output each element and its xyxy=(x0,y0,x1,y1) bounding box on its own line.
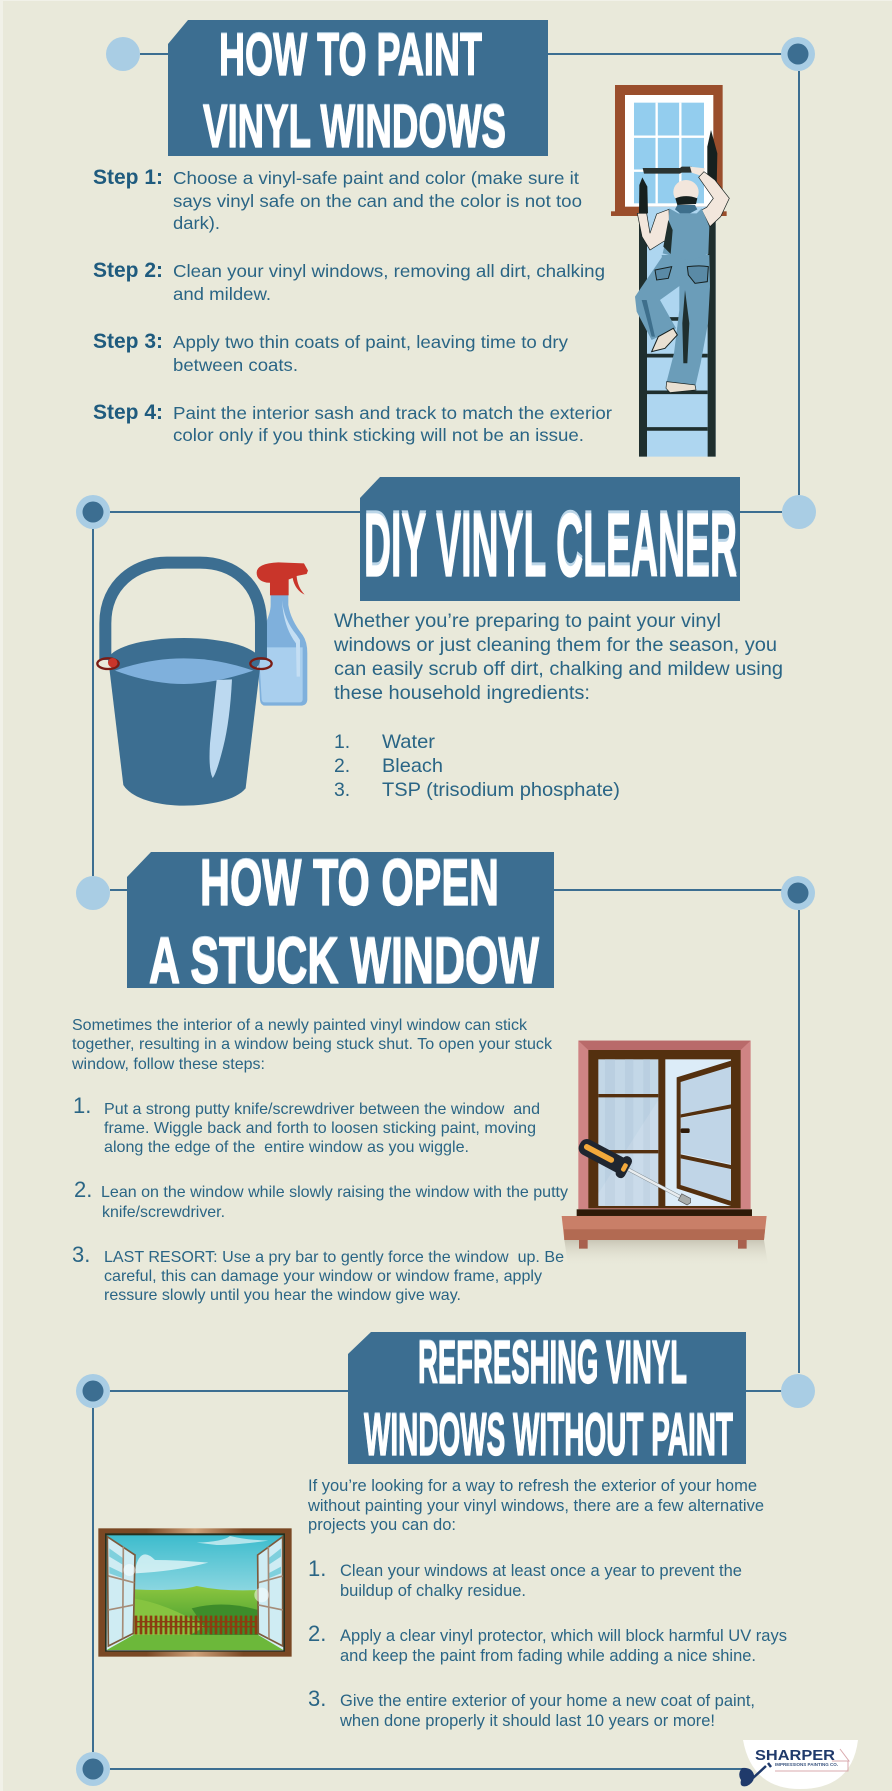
intro paragraph: projects you can do: xyxy=(308,1516,456,1534)
step 3 xyxy=(93,330,568,375)
ingredients list: 3. xyxy=(334,779,350,801)
logo: Sharper Impressions Painting Co.: SHARPER xyxy=(755,1747,835,1764)
step 3: Step 3: xyxy=(93,330,163,353)
list item 3 xyxy=(72,1242,564,1304)
list item 2: 2. xyxy=(308,1621,326,1646)
step 2: Step 2: xyxy=(93,259,163,282)
list item 3: 3. xyxy=(308,1686,326,1711)
intro paragraph: windows or just cleaning them for the season, you xyxy=(333,634,777,656)
ingredients list: Water xyxy=(382,731,436,753)
step 1: Step 1: xyxy=(93,166,163,189)
list item 2: knife/screwdriver. xyxy=(102,1204,225,1221)
ingredients list: 1. xyxy=(334,731,350,753)
list item 3: LAST RESORT: Use a pry bar to gently force the window up. Be xyxy=(104,1249,564,1266)
connector node: right xyxy=(782,495,816,529)
intro paragraph: window, follow these steps: xyxy=(71,1056,265,1073)
banner: how to paint vinyl windows: VINYL WINDOWS xyxy=(203,93,506,160)
connector node: top right xyxy=(781,37,815,71)
intro paragraph: together, resulting in a window being stuck shut. To open your stuck xyxy=(72,1036,553,1053)
intro paragraph xyxy=(307,1477,764,1534)
banner: how to open a stuck window: HOW TO OPEN xyxy=(200,845,499,918)
list item 2: Apply a clear vinyl protector, which will block harmful UV rays xyxy=(340,1627,787,1645)
list item 3: Give the entire exterior of your home a new coat of paint, xyxy=(340,1692,755,1710)
list item 2 xyxy=(74,1177,568,1221)
list item 1: 1. xyxy=(73,1093,91,1118)
banner: refreshing vinyl windows without paint xyxy=(348,1328,746,1468)
illustration: open window with green landscape xyxy=(98,1528,292,1657)
list item 1: Put a strong putty knife/screwdriver between the window and xyxy=(104,1101,540,1118)
section 4: refreshing vinyl windows without paint xyxy=(76,1328,858,1789)
step 1 xyxy=(93,166,582,233)
list item 1 xyxy=(73,1093,540,1156)
list item 2: 2. xyxy=(74,1177,92,1202)
step 4: Paint the interior sash and track to match the exterior xyxy=(173,403,612,423)
step 2: Clean your vinyl windows, removing all dirt, chalking xyxy=(173,261,605,281)
intro paragraph: If you’re looking for a way to refresh the exterior of your home xyxy=(308,1477,757,1495)
step 4: Step 4: xyxy=(93,401,163,424)
ingredients list: Bleach xyxy=(382,755,443,777)
banner: how to paint vinyl windows: HOW TO PAINT xyxy=(219,22,482,88)
list item 3: when done properly it should last 10 years or more! xyxy=(339,1712,715,1730)
connector node: left xyxy=(76,1374,110,1408)
list item 2: Lean on the window while slowly raising the window with the putty xyxy=(101,1184,568,1201)
connector node: left xyxy=(76,876,110,910)
connector node: bottom left xyxy=(76,1752,110,1786)
ingredients list: TSP (trisodium phosphate) xyxy=(382,779,620,801)
list item 3: 3. xyxy=(72,1242,90,1267)
list item 3: careful, this can damage your window or window frame, apply xyxy=(104,1268,542,1285)
intro paragraph: Sometimes the interior of a newly painted vinyl window can stick xyxy=(72,1017,528,1034)
intro paragraph: these household ingredients: xyxy=(334,682,590,704)
step 1: dark). xyxy=(173,213,220,233)
illustration: painter on ladder at window xyxy=(611,85,729,457)
step 1: says vinyl safe on the can and the color is not too xyxy=(173,191,582,211)
banner: how to open a stuck window: HOW TO OPEN xyxy=(200,846,499,919)
step 2 xyxy=(93,259,605,304)
list item 1: frame. Wiggle back and forth to loosen sticking paint, moving xyxy=(104,1120,536,1137)
list item 2 xyxy=(308,1621,787,1665)
banner: how to open a stuck window: A STUCK WINDOW xyxy=(149,923,539,996)
intro paragraph xyxy=(333,610,783,704)
banner: how to open a stuck window xyxy=(127,845,554,997)
section 1: how to paint vinyl windows xyxy=(93,20,815,457)
illustration: bucket and spray bottle xyxy=(97,562,308,806)
intro paragraph: Whether you’re preparing to paint your vinyl xyxy=(334,610,721,632)
intro paragraph xyxy=(71,1017,553,1073)
list item 1: 1. xyxy=(308,1556,326,1581)
connector node: right xyxy=(781,876,815,910)
list item 1: buildup of chalky residue. xyxy=(340,1582,526,1600)
banner: how to paint vinyl windows: HOW TO PAINT xyxy=(219,21,482,87)
banner: how to paint vinyl windows: VINYL WINDOWS xyxy=(203,92,506,159)
banner: how to paint vinyl windows xyxy=(168,20,548,160)
list item 1: Clean your windows at least once a year to prevent the xyxy=(340,1562,742,1580)
intro paragraph: can easily scrub off dirt, chalking and mildew using xyxy=(334,658,783,680)
banner: DIY vinyl cleaner xyxy=(360,477,740,601)
section 3: how to open a stuck window xyxy=(71,845,815,1304)
logo: Sharper Impressions Painting Co.: IMPRESSIONS PAINTING CO. xyxy=(775,1762,838,1767)
step 4 xyxy=(93,401,612,445)
ingredients list: 2. xyxy=(334,755,350,777)
logo: Sharper Impressions Painting Co. xyxy=(739,1740,858,1789)
list item 1 xyxy=(308,1556,742,1600)
section 2: DIY vinyl cleaner xyxy=(76,477,816,806)
list item 3 xyxy=(308,1686,755,1730)
step 4: color only if you think sticking will not be an issue. xyxy=(173,425,584,445)
list item 3: ressure slowly until you hear the window give way. xyxy=(104,1287,461,1304)
list item 2: and keep the paint from fading while adding a nice shine. xyxy=(340,1647,756,1665)
ingredients list xyxy=(334,731,620,801)
illustration: window with screwdriver xyxy=(562,1041,768,1267)
banner: how to open a stuck window: A STUCK WINDOW xyxy=(149,924,539,997)
list item 1: along the edge of the entire window as you wiggle. xyxy=(104,1139,469,1156)
intro paragraph: without painting your vinyl windows, there are a few alternative xyxy=(307,1497,764,1515)
step 1: Choose a vinyl-safe paint and color (make sure it xyxy=(173,168,579,188)
step 2: and mildew. xyxy=(173,284,271,304)
step 3: between coats. xyxy=(173,355,298,375)
step 3: Apply two thin coats of paint, leaving time to dry xyxy=(173,332,568,352)
connector node: left xyxy=(76,495,110,529)
connector node: top left xyxy=(106,37,140,71)
connector node: right xyxy=(781,1374,815,1408)
